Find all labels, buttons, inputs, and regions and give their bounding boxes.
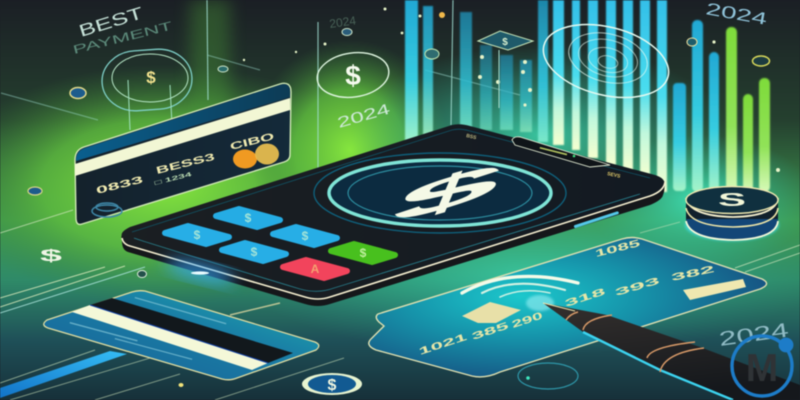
- pen: [543, 303, 800, 400]
- app button 2: [216, 209, 280, 227]
- icon: small ring lower card: [518, 363, 578, 389]
- phone pay ring: [314, 153, 566, 233]
- card mastercard circles: [233, 150, 257, 168]
- heading: best payment: PAYMENT: [71, 18, 175, 57]
- icon: dollar coin bottom: $: [328, 377, 337, 394]
- card numbers: 1085: [594, 238, 642, 260]
- icon: dollar coin bottom: [302, 373, 362, 395]
- card contactless arcs: [462, 276, 578, 297]
- heading: best payment: [71, 3, 175, 57]
- phone status text: BSS: [466, 133, 478, 141]
- card numbers: 1021: [418, 332, 469, 358]
- logo: M circle: M: [746, 347, 778, 390]
- card number text: CIBO: [229, 131, 276, 153]
- icon: dollar ring top centre: $: [345, 60, 361, 91]
- heading: best payment: BEST: [77, 3, 145, 41]
- card numbers: 318: [564, 286, 608, 310]
- app button 3: $: [251, 245, 258, 259]
- phone: SEVS: [607, 171, 622, 180]
- icon: dollar ring top centre: [314, 48, 392, 102]
- phone dollar sign: $: [383, 148, 514, 236]
- card numbers: 382: [670, 264, 717, 284]
- card number text: [95, 131, 276, 197]
- phone glow: [163, 256, 237, 288]
- chart: cyan bars: [405, 0, 667, 192]
- app button 2: $: [245, 211, 252, 225]
- card white stripe: [75, 98, 290, 176]
- app button 4: $: [302, 229, 309, 243]
- card white band: [72, 305, 268, 370]
- icon: dollar coin ring left: [100, 47, 194, 130]
- icon: contactless fingerprint rings: [536, 13, 676, 109]
- background vertical light lines: [1, 0, 520, 168]
- credit card top left: [75, 83, 291, 224]
- card magnetic band: [76, 84, 290, 161]
- card numbers: [418, 238, 717, 358]
- phone edge highlight: [122, 124, 665, 300]
- card numbers: 290: [511, 310, 545, 331]
- phone side button: [574, 211, 619, 228]
- blue light beam: [0, 351, 127, 398]
- coin stack: [685, 186, 779, 241]
- app button green: [331, 244, 395, 262]
- phone body shadow: [121, 127, 664, 306]
- year label: 2024 top centre: 2024: [328, 13, 357, 31]
- phone notch: [512, 137, 610, 167]
- card lower left: [44, 291, 319, 380]
- card chip: [462, 302, 521, 323]
- guide lines lower left: [0, 210, 800, 400]
- card lower right: [369, 238, 767, 377]
- card number text: 0833: [95, 174, 145, 197]
- phone: [121, 124, 665, 306]
- card black band: [90, 298, 293, 363]
- card label box: [683, 279, 746, 300]
- app button 1: $: [194, 228, 201, 242]
- app button red: [283, 260, 347, 278]
- icon: shield dollar badge: $: [502, 37, 508, 48]
- app button 4: [273, 227, 337, 245]
- year label: 2024 left of phone: 2024: [335, 101, 392, 132]
- icon: shield dollar badge: [478, 31, 533, 108]
- card numbers: 385: [471, 320, 511, 343]
- icon: dollar coin ring left: $: [146, 68, 156, 87]
- app buttons: [165, 209, 395, 278]
- card number text: BESS3: [155, 152, 217, 177]
- app button 1: [165, 226, 229, 244]
- chart: green bars: [673, 20, 770, 192]
- year label: 2024 bottom right: 2024: [718, 319, 790, 351]
- scattered light particles: [243, 8, 780, 172]
- app button red: A: [311, 262, 320, 276]
- icon: dollar sign left: $: [40, 246, 63, 265]
- card faint text: [70, 297, 226, 360]
- logo: M circle: [732, 336, 793, 396]
- card numbers: 393: [614, 275, 662, 299]
- coin stack: S: [718, 190, 746, 210]
- card number text: □ 1234: [154, 172, 194, 187]
- card contactless mark: [92, 203, 122, 217]
- app button 3: [222, 243, 286, 261]
- app button green: $: [360, 246, 367, 260]
